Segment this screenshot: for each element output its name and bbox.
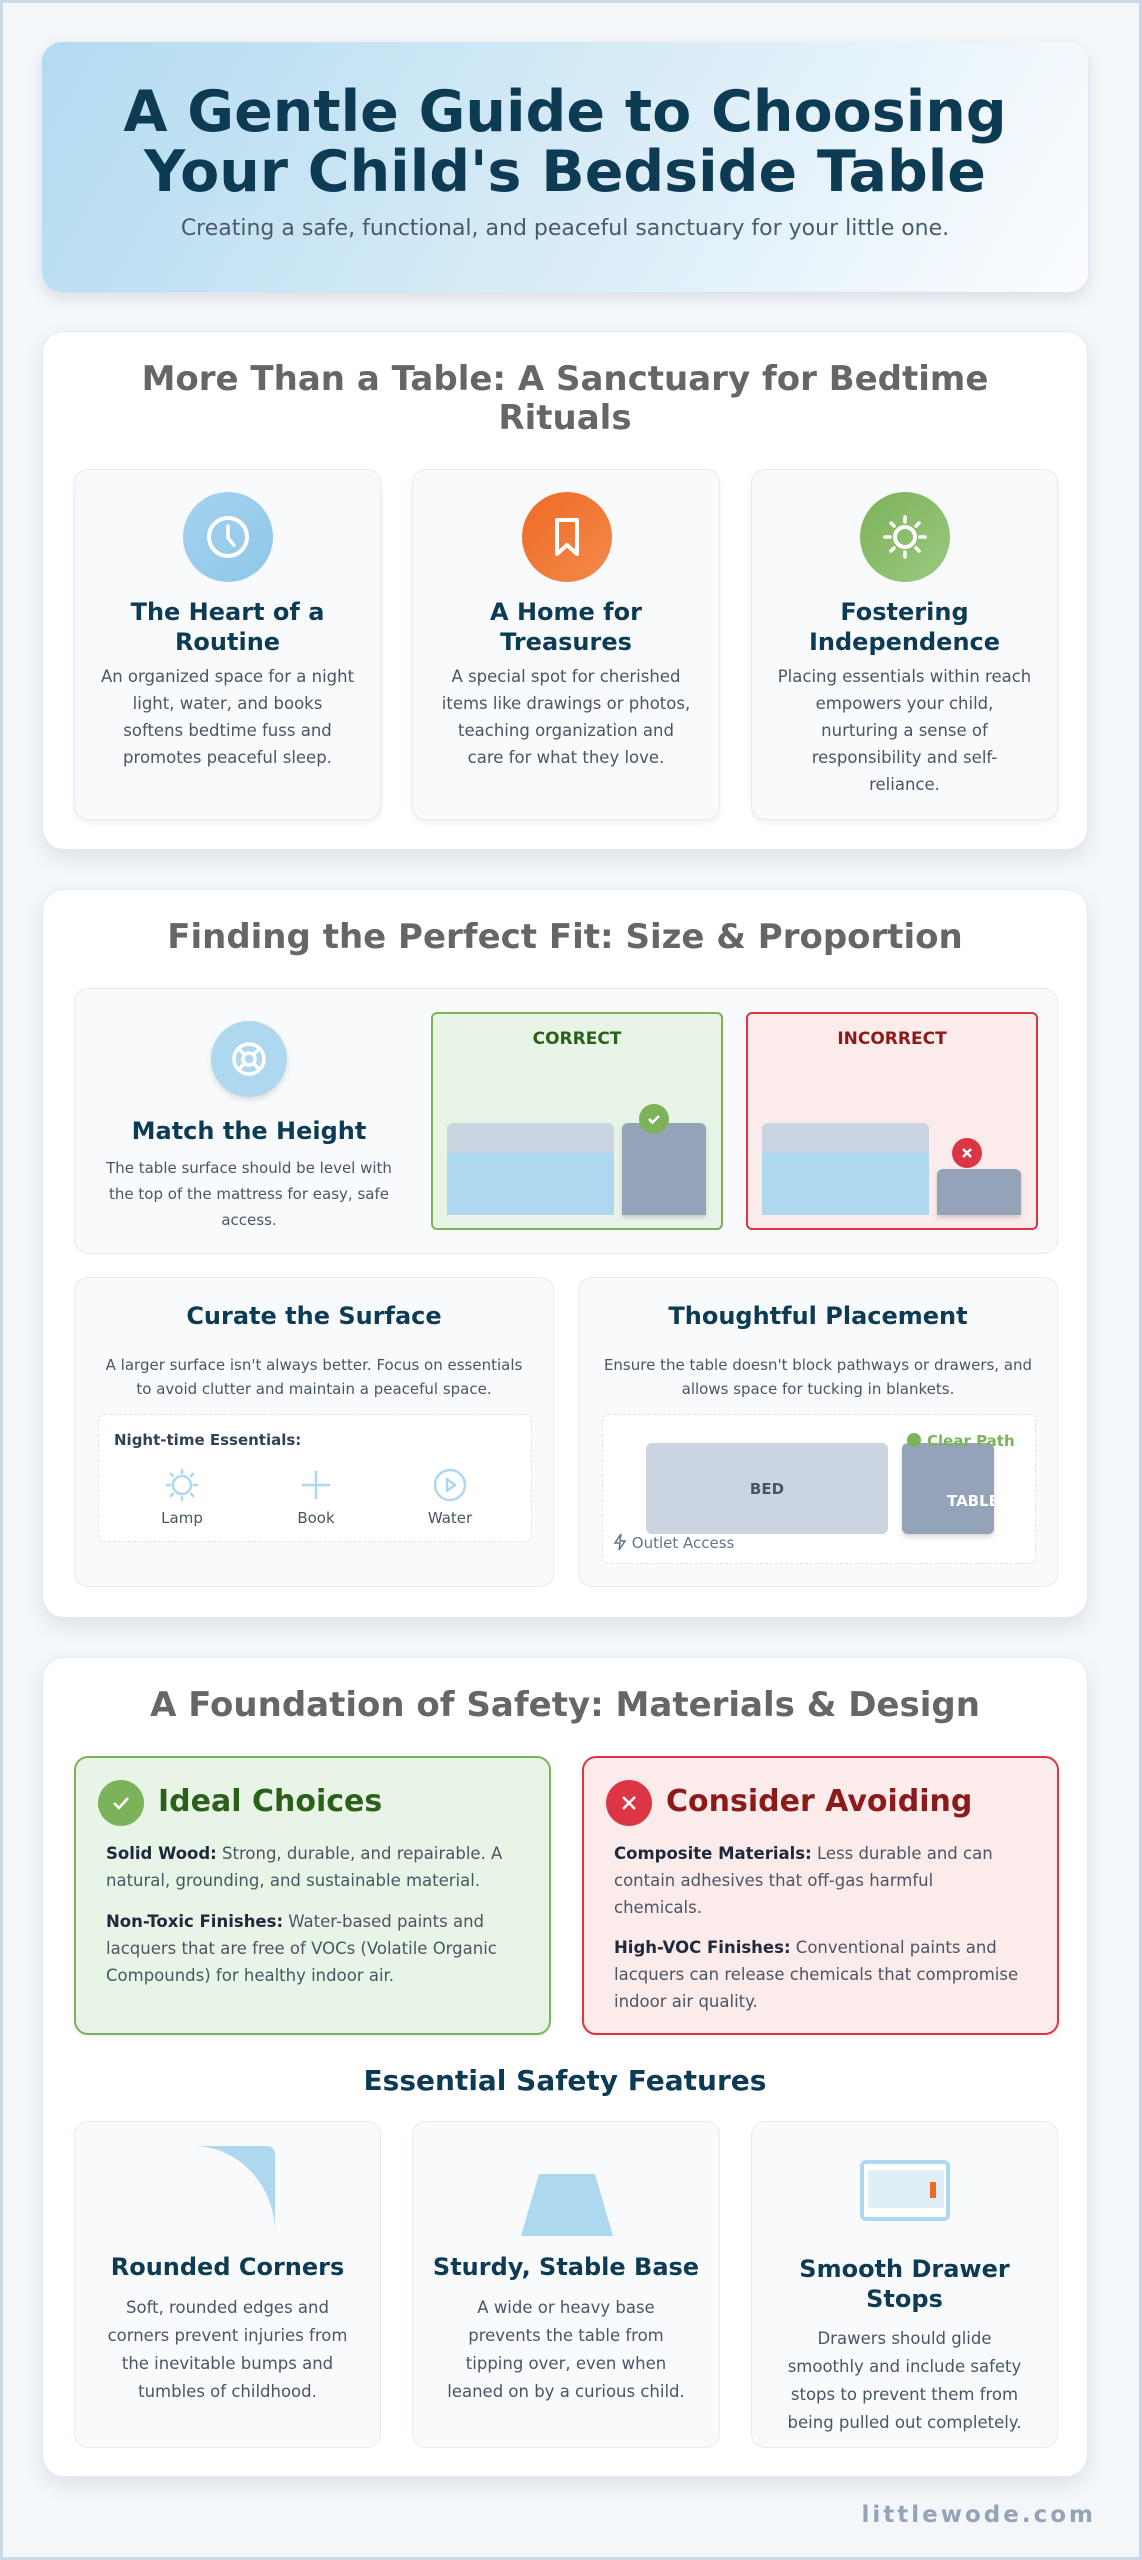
- title: Thoughtful Placement: [668, 1302, 968, 1330]
- panel: sanctuary: [42, 331, 1088, 850]
- card: independence: [751, 469, 1058, 820]
- card: stable base: [412, 2121, 720, 2448]
- icon: x: [952, 1138, 982, 1168]
- card: rounded corners: tumbles of childhood.: [138, 2382, 317, 2401]
- card: match height: [74, 988, 1058, 1254]
- box: consider avoiding: contain adhesives that off-gas harmful: [614, 1871, 933, 1890]
- title: Your Child's Bedside Table: [144, 139, 986, 205]
- card: stable base: prevents the table from: [468, 2326, 664, 2345]
- card: drawer stops: Smooth Drawer: [799, 2255, 1010, 2283]
- box: ideal choices: Solid Wood: Strong, durable, and repairable. A natural, grounding, and sustainable material.: [106, 1844, 502, 1890]
- title: The Heart of a: [131, 598, 324, 626]
- title: Curate the Surface: [186, 1302, 442, 1330]
- card: placement: [578, 1277, 1058, 1587]
- text: [442, 667, 690, 767]
- card: routine: [74, 469, 381, 820]
- text: [106, 1356, 522, 1398]
- heading: A Foundation of Safety: Materials & Design: [150, 1685, 980, 1725]
- heading: [142, 359, 988, 438]
- text: teaching organization and: [458, 721, 674, 740]
- text: A larger surface isn't always better. Focus on essentials: [106, 1356, 522, 1374]
- clear path label: Clear Path: [927, 1432, 1015, 1450]
- panel: safety: [42, 1657, 1088, 2477]
- box: ideal choices: Non-Toxic Finishes: Water-based paints and lacquers that are free of VOCs (Volatile Organic Compounds) for healthy indoor air.: [106, 1912, 497, 1985]
- heading: Rituals: [498, 398, 632, 438]
- text: care for what they love.: [468, 748, 664, 767]
- card: stable base: A wide or heavy base: [477, 2298, 655, 2317]
- title: [123, 79, 1007, 205]
- text: reliance.: [869, 775, 940, 794]
- outlet label: Outlet Access: [632, 1534, 734, 1552]
- box: ideal choices: Ideal Choices: [158, 1784, 382, 1819]
- card: drawer stops: stops to prevent them from: [791, 2385, 1018, 2404]
- box: consider avoiding: Composite Materials: Less durable and can: [614, 1844, 993, 1863]
- title: A Gentle Guide to Choosing: [123, 79, 1007, 145]
- card: stable base: leaned on by a curious child.: [447, 2382, 685, 2401]
- title: Match the Height: [132, 1117, 366, 1145]
- card: rounded corners: corners prevent injuries from: [108, 2326, 347, 2345]
- card: stable base: Sturdy, Stable Base: [433, 2253, 699, 2281]
- text: A special spot for cherished: [452, 667, 680, 686]
- card: rounded corners: [74, 2121, 381, 2448]
- icon: check: [98, 1780, 144, 1826]
- essentials box: [98, 1414, 532, 1542]
- text: [604, 1356, 1032, 1398]
- diagram: correct: [431, 1012, 723, 1230]
- card: drawer stops: being pulled out completely.: [788, 2413, 1021, 2432]
- icon: bookmark: [522, 492, 612, 582]
- card: drawer stops: [751, 2121, 1058, 2448]
- text: [778, 667, 1031, 794]
- title: [130, 598, 324, 656]
- icon: book: [297, 1471, 335, 1527]
- title: Independence: [809, 628, 1000, 656]
- card: drawer stops: Stops: [866, 2285, 943, 2313]
- box: ideal choices: [74, 1756, 551, 2035]
- text: softens bedtime fuss and: [123, 721, 332, 740]
- heading: Finding the Perfect Fit: Size & Proportion: [167, 917, 963, 957]
- subheading: Essential Safety Features: [364, 2064, 766, 2097]
- icon: trapezoid: [521, 2174, 613, 2236]
- text: Ensure the table doesn't block pathways or drawers, and: [604, 1356, 1032, 1374]
- icon: drawer: [860, 2160, 950, 2221]
- text: allows space for tucking in blankets.: [682, 1380, 954, 1398]
- title: A Home for: [490, 598, 642, 626]
- panel: fit: [42, 889, 1088, 1618]
- footer: brand: littlewode.com: [862, 2502, 1096, 2528]
- card: curate: [74, 1277, 554, 1587]
- icon: corner: [196, 2146, 275, 2230]
- text: [101, 667, 354, 767]
- box: consider avoiding: chemicals.: [614, 1898, 702, 1917]
- icon: sun: [860, 492, 950, 582]
- essentials box: Night-time Essentials:: [114, 1431, 301, 1449]
- card: rounded corners: the inevitable bumps and: [122, 2354, 333, 2373]
- diagram: correct: CORRECT: [533, 1029, 621, 1049]
- subtitle: Creating a safe, functional, and peaceful sanctuary for your little one.: [181, 216, 949, 241]
- text: items like drawings or photos,: [442, 694, 690, 713]
- text: responsibility and self-: [812, 748, 997, 767]
- text: promotes peaceful sleep.: [123, 748, 332, 767]
- box: consider avoiding: Consider Avoiding: [666, 1784, 972, 1819]
- icon: water: [428, 1468, 472, 1527]
- card: drawer stops: Drawers should glide: [817, 2329, 992, 2348]
- text: to avoid clutter and maintain a peaceful space.: [136, 1380, 492, 1398]
- text: light, water, and books: [133, 694, 322, 713]
- heading: More Than a Table: A Sanctuary for Bedtime: [142, 359, 988, 399]
- box: consider avoiding: High-VOC Finishes: Conventional paints and lacquers can release chemicals that compromise indoor air quality.: [614, 1938, 1018, 2011]
- icon: lifebuoy: [211, 1021, 287, 1097]
- icon: x: [606, 1780, 652, 1826]
- text: empowers your child,: [816, 694, 993, 713]
- icon: book: Book: [297, 1509, 335, 1527]
- icon: clock: [183, 492, 273, 582]
- card: rounded corners: Rounded Corners: [111, 2253, 344, 2281]
- placement diagram: [602, 1414, 1036, 1564]
- title: Routine: [175, 628, 280, 656]
- box: consider avoiding: [582, 1756, 1059, 2035]
- icon: lamp: [161, 1468, 203, 1527]
- card: treasures: [412, 469, 720, 820]
- text: The table surface should be level with the top of the mattress for easy, safe access.: [106, 1159, 392, 1229]
- icon: lamp: Lamp: [161, 1509, 203, 1527]
- title: [809, 598, 1000, 656]
- placement diagram: BED: [750, 1480, 784, 1498]
- icon: check: [639, 1104, 669, 1134]
- icon: water: Water: [428, 1509, 472, 1527]
- text: Placing essentials within reach: [778, 667, 1031, 686]
- card: stable base: tipping over, even when: [466, 2354, 666, 2373]
- text: nurturing a sense of: [821, 721, 988, 740]
- title: [490, 598, 642, 656]
- title: Treasures: [500, 628, 632, 656]
- text: An organized space for a night: [101, 667, 354, 686]
- diagram: incorrect: [746, 1012, 1038, 1230]
- header banner: [42, 42, 1088, 292]
- diagram: incorrect: INCORRECT: [837, 1029, 947, 1049]
- title: Fostering: [840, 598, 969, 626]
- card: rounded corners: Soft, rounded edges and: [126, 2298, 329, 2317]
- card: drawer stops: smoothly and include safety: [788, 2357, 1021, 2376]
